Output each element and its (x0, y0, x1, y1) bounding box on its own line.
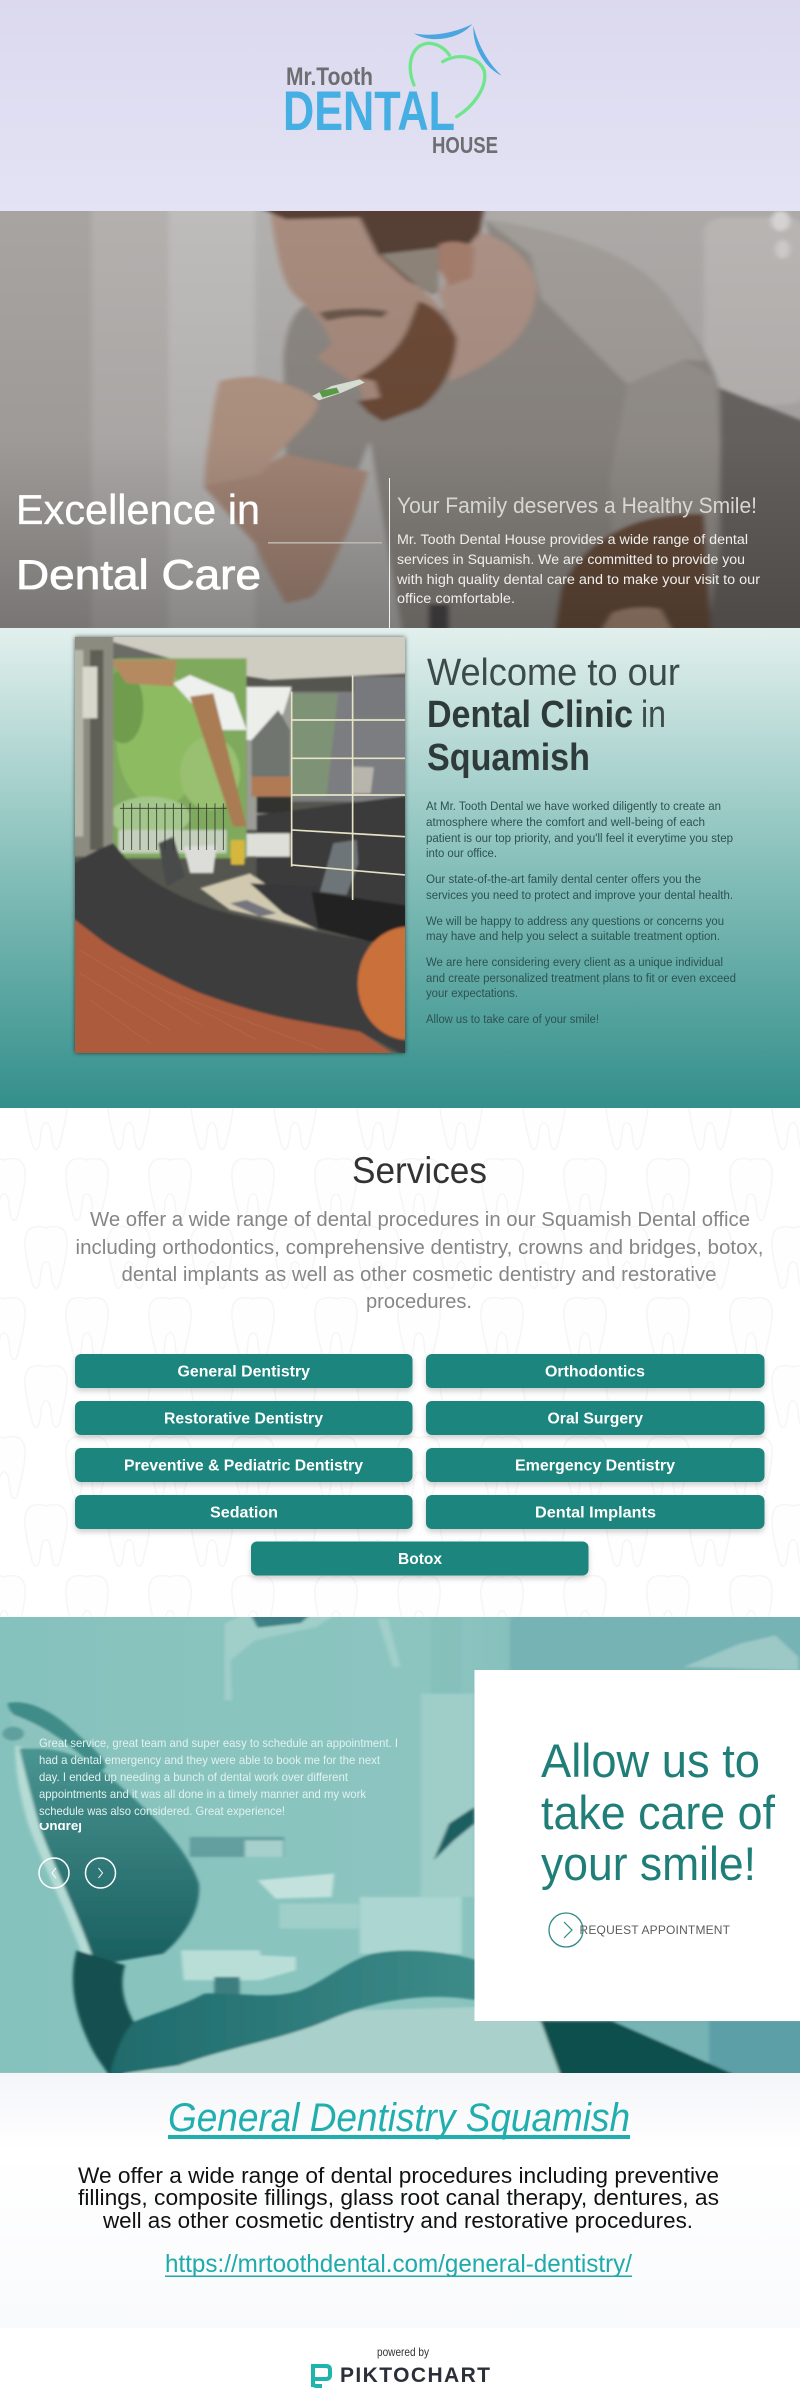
button: Sedation: Sedation (210, 1504, 278, 1522)
hero title: Excellence in (16, 486, 260, 533)
call to action heading: your smile! (541, 1837, 756, 1890)
powered by Piktochart: PIKTOCHART (340, 2364, 490, 2387)
panel: footer content (0, 2073, 800, 2328)
powered by Piktochart: powered by (377, 2345, 429, 2359)
logo: Mr. Tooth Dental House: Mr.Tooth (286, 63, 373, 91)
hero paragraph: Mr. Tooth Dental House provides a wide range of dental (397, 532, 748, 547)
hero title (16, 486, 261, 598)
button: Dental Implants (426, 1495, 764, 1529)
services intro text: procedures. (366, 1291, 472, 1313)
testimonial text: had a dental emergency and they were able to book me for the next (39, 1753, 381, 1767)
panel: welcome section (0, 628, 800, 1108)
button: Botox: Botox (398, 1551, 442, 1568)
welcome body text: may have and help you select a suitable treatment option. (426, 929, 720, 943)
services intro text (76, 1209, 764, 1313)
footer body text (78, 2163, 719, 2233)
welcome heading: Welcome to our (427, 652, 680, 694)
testimonial text: day. I ended up needing a bunch of dental work over different (39, 1770, 349, 1784)
footer link: https://mrtoothdental.com/general-dentistry/ (165, 2250, 632, 2278)
welcome body text: your expectations. (426, 986, 518, 1000)
logo: Mr. Tooth Dental House: DENTAL (283, 79, 455, 142)
welcome body text: patient is our top priority, and you'll feel it everytime you step (426, 831, 733, 845)
button: Dental Implants: Dental Implants (535, 1504, 656, 1522)
button: Preventive and Pediatric Dentistry (75, 1448, 412, 1482)
photo: dental chair with teal tint (0, 1610, 800, 2078)
panel: services (0, 1108, 800, 1617)
logo: Mr. Tooth Dental House: HOUSE (432, 132, 498, 158)
welcome body text: Allow us to take care of your smile! (426, 1012, 599, 1026)
button: Oral Surgery (426, 1401, 764, 1435)
footer heading: General Dentistry Squamish (168, 2096, 630, 2140)
footer body text: We offer a wide range of dental procedures including preventive (78, 2163, 719, 2188)
hero divider lines (268, 478, 390, 628)
welcome body text: atmosphere where the comfort and well-being of each (426, 815, 705, 829)
welcome heading: in (641, 694, 666, 736)
hero paragraph: office comfortable. (397, 591, 515, 606)
photo: clinic reception (72, 634, 408, 1056)
welcome heading (427, 652, 680, 779)
call to action heading: Allow us to (541, 1734, 760, 1787)
hero tagline: Your Family deserves a Healthy Smile! (397, 493, 757, 518)
panel: header with logo (0, 0, 800, 211)
services heading: Services (352, 1150, 487, 1191)
testimonial text: schedule was also considered. Great experience! (39, 1804, 285, 1818)
logo: Mr. Tooth Dental House (283, 24, 502, 158)
button: Emergency Dentistry: Emergency Dentistry (515, 1458, 675, 1474)
panel: hero (0, 204, 800, 638)
photo: man brushing teeth (0, 204, 800, 638)
services intro text: We offer a wide range of dental procedures in our Squamish Dental office (90, 1209, 750, 1231)
welcome body text: into our office. (426, 846, 497, 860)
panel: testimonial and call to action (0, 1610, 800, 2078)
hero title: Dental Care (16, 551, 261, 598)
services intro text: including orthodontics, comprehensive dentistry, crowns and bridges, botox, (76, 1237, 764, 1259)
welcome body text: and create personalized treatment plans to fit or even exceed (426, 971, 736, 985)
testimonial text: Great service, great team and super easy to schedule an appointment. I (39, 1736, 398, 1750)
call to action heading: take care of (541, 1786, 776, 1839)
button: Orthodontics: Orthodontics (545, 1364, 645, 1380)
button: Restorative Dentistry: Restorative Dentistry (164, 1410, 323, 1428)
button: Oral Surgery: Oral Surgery (548, 1410, 643, 1428)
hero paragraph (396, 532, 761, 606)
icon: Piktochart logo mark (313, 2366, 330, 2387)
service buttons (75, 1354, 764, 1576)
button: General Dentistry (75, 1354, 412, 1388)
welcome body text: Our state-of-the-art family dental center offers you the (426, 872, 701, 886)
testimonial text: appointments and it was all done in a timely manner and my work (39, 1787, 367, 1801)
welcome heading: Squamish (427, 737, 590, 779)
button: Orthodontics (426, 1354, 764, 1388)
call to action card (474, 1670, 800, 2021)
welcome body text (426, 799, 736, 1026)
button: Restorative Dentistry (75, 1401, 412, 1435)
welcome body text: We are here considering every client as a unique individual (426, 955, 723, 969)
welcome body text: services you need to protect and improve your dental health. (426, 888, 733, 902)
carousel previous arrow (39, 1858, 69, 1888)
testimonial author (clipped): Ondrej (39, 1818, 82, 1833)
footer body text: fillings, composite fillings, glass root canal therapy, dentures, as (78, 2185, 719, 2210)
hero paragraph: services in Squamish. We are committed to provide you (397, 552, 745, 567)
button: Botox (251, 1542, 588, 1576)
welcome body text: At Mr. Tooth Dental we have worked diligently to create an (426, 799, 721, 813)
request appointment link: REQUEST APPOINTMENT (580, 1923, 731, 1937)
button: Sedation (75, 1495, 412, 1529)
button: Preventive and Pediatric Dentistry: Preventive & Pediatric Dentistry (124, 1458, 363, 1474)
button: Emergency Dentistry (426, 1448, 764, 1482)
welcome heading: Dental Clinic (427, 694, 633, 736)
welcome body text: We will be happy to address any questions or concerns you (426, 914, 724, 928)
button: General Dentistry: General Dentistry (178, 1364, 310, 1380)
powered by Piktochart (0, 2328, 800, 2408)
services intro text: dental implants as well as other cosmetic dentistry and restorative (122, 1264, 716, 1286)
request appointment link (549, 1913, 731, 1947)
call to action heading (541, 1734, 776, 1890)
footer body text: well as other cosmetic dentistry and restorative procedures. (102, 2208, 693, 2233)
testimonial text (39, 1736, 398, 1818)
hero paragraph: with high quality dental care and to make your visit to our (396, 572, 761, 587)
carousel next arrow (86, 1858, 116, 1888)
